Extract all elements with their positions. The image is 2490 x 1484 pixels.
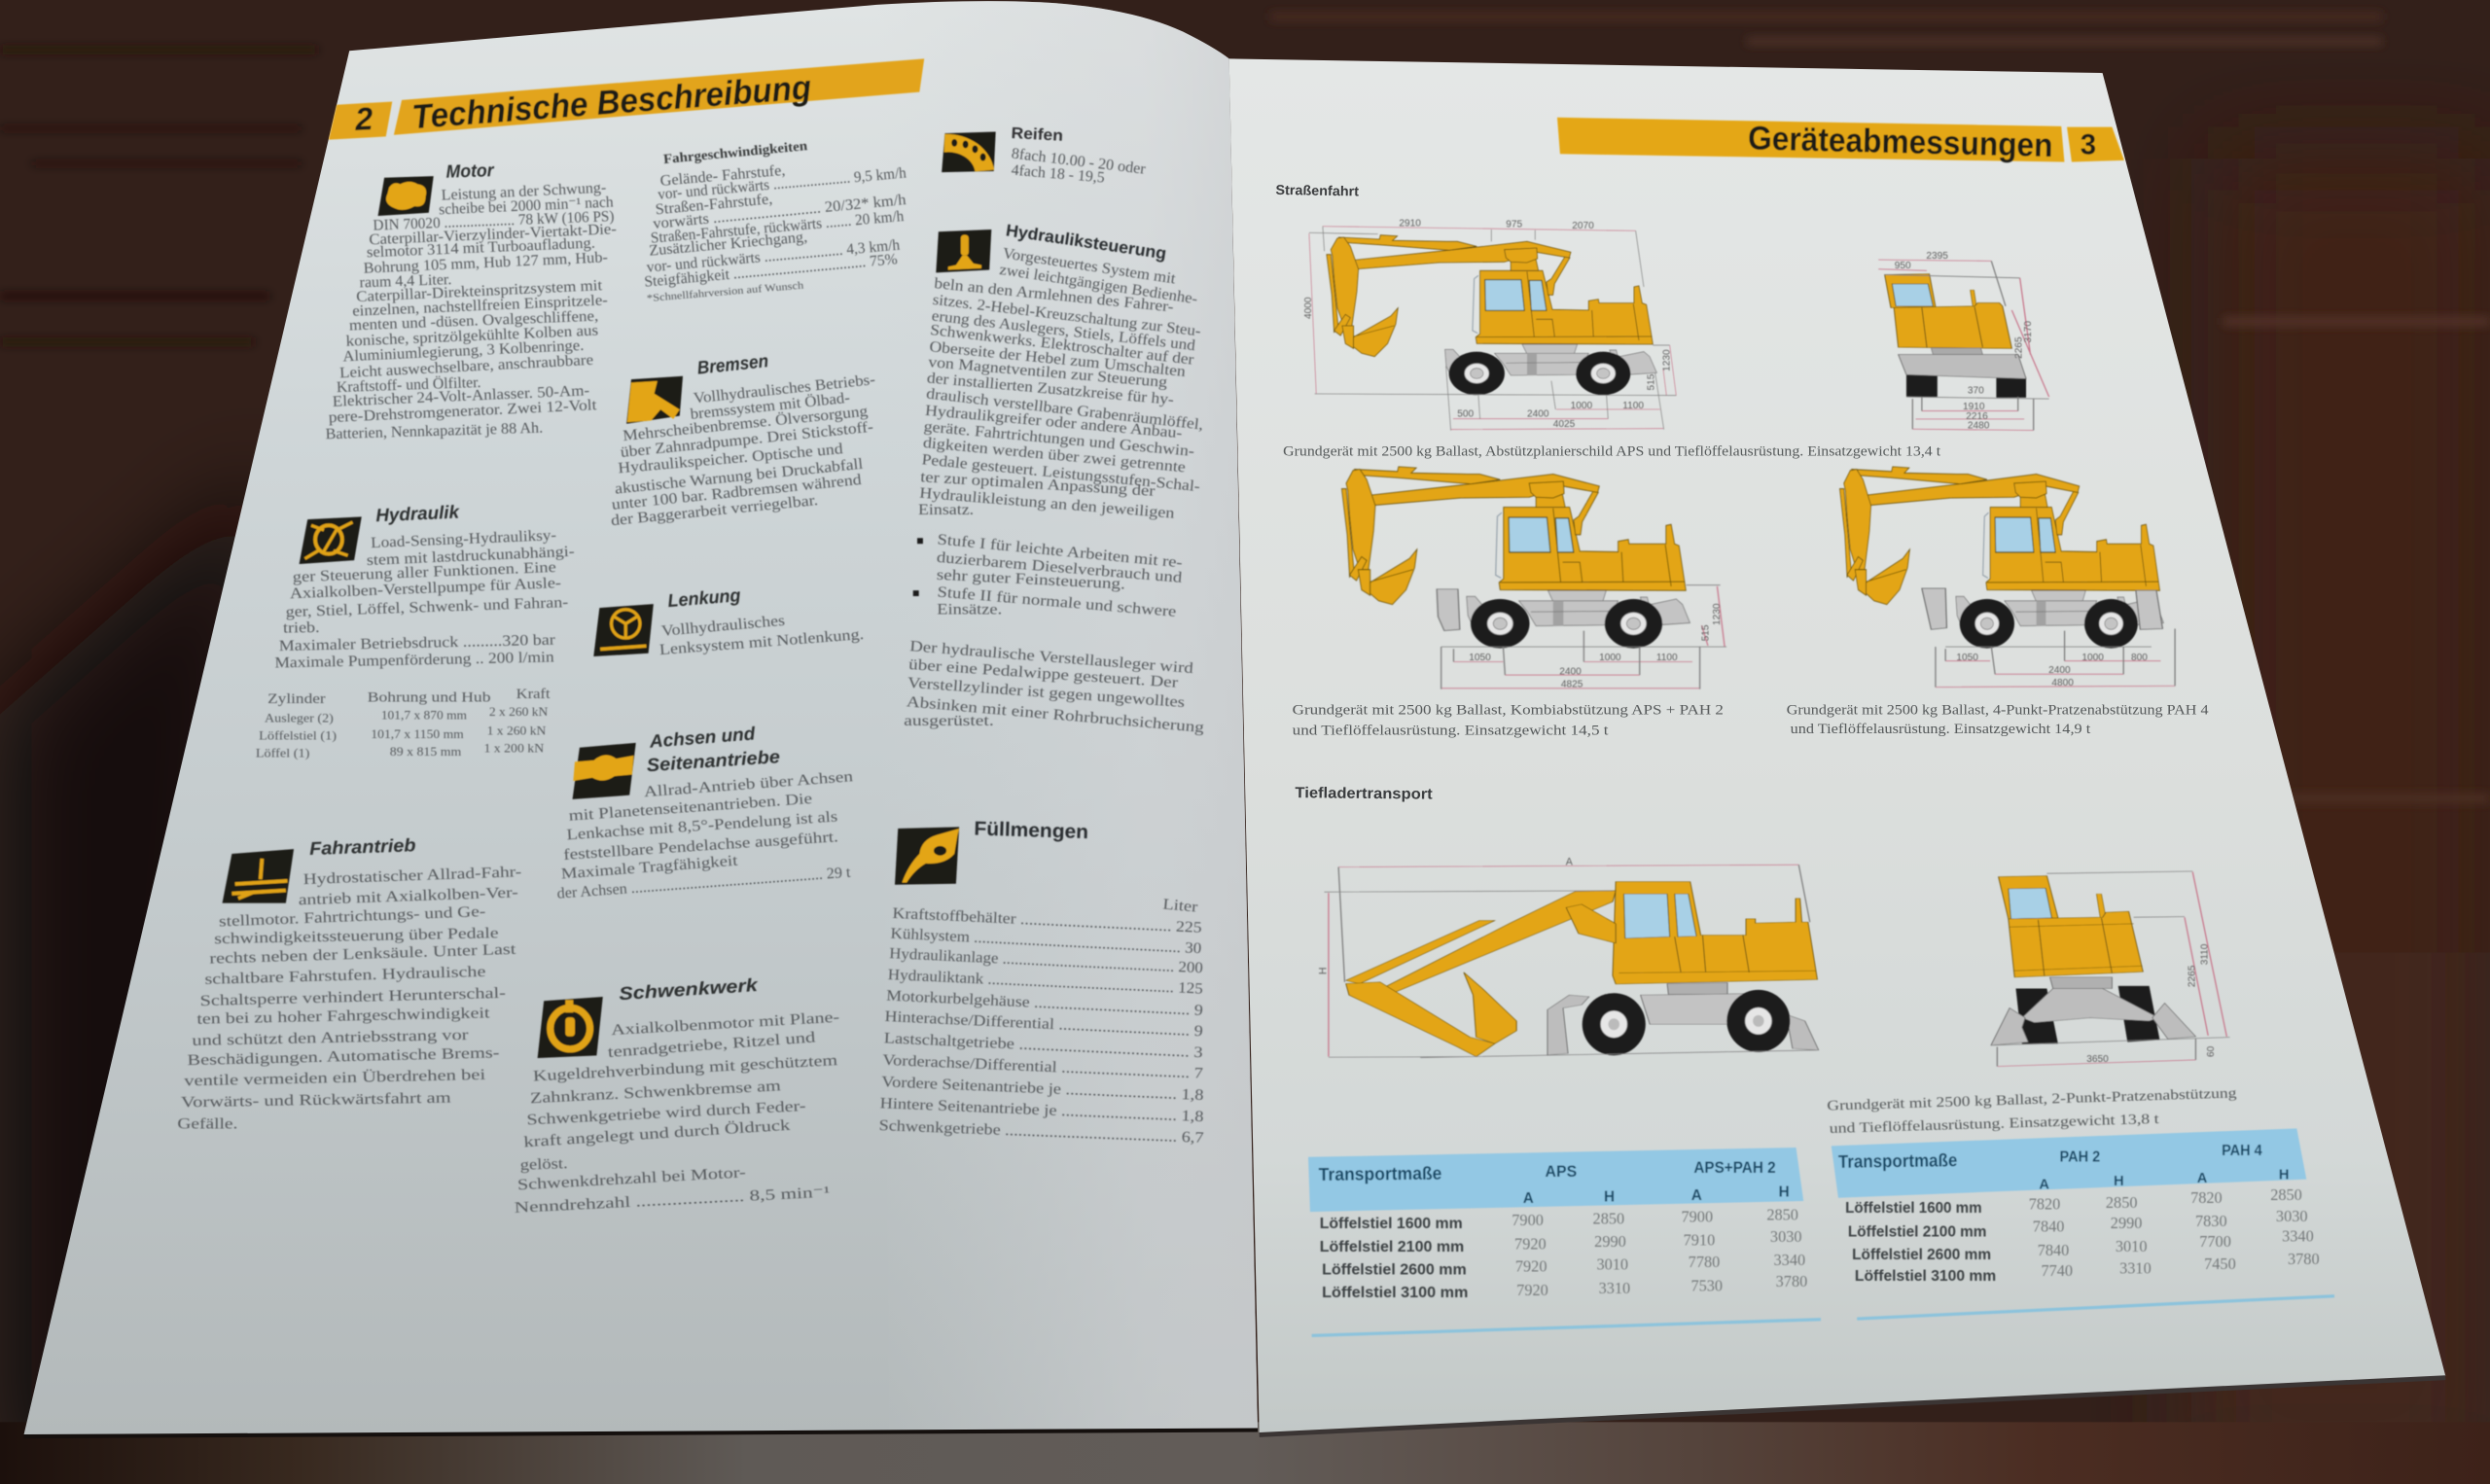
table: Transportmaße APS, APS+PAH 2: 7920 [1515, 1256, 1547, 1275]
table: Transportmaße PAH 2, PAH 4: 7840 [2033, 1218, 2064, 1235]
section: Füllmengen [878, 818, 1204, 1147]
right page [1229, 58, 2445, 1434]
text: Hydraulik description: trieb. [283, 619, 320, 637]
text: Verstellausleger: ausgerüstet. [904, 713, 994, 729]
table: Transportmaße APS, APS+PAH 2: 7530 [1690, 1277, 1723, 1295]
table: Transportmaße PAH 2, PAH 4 [1832, 1128, 2334, 1319]
list: capacities in litres: Motorkurbelgehäuse .................................... 9 [886, 988, 1203, 1019]
section: Reifen [942, 124, 1147, 187]
list: capacities in litres [878, 897, 1204, 1147]
left page [23, 1, 1258, 1436]
table: Transportmaße PAH 2, PAH 4: Löffelstiel 1600 mm [1845, 1200, 1982, 1217]
text: Fahrantrieb description: ten bei zu hoher Fahrgeschwindigkeit [196, 1005, 490, 1028]
list: capacities in litres: Kraftstoffbehälter ................................... 225 [892, 905, 1202, 936]
text: Hydrauliksteuerung description: zwei leichtgängigen Bedienhe- [998, 262, 1198, 307]
text: Schwenkwerk description: Zahnkranz. Schwenkbremse am [530, 1078, 782, 1107]
text: Hydrauliksteuerung description: Hydraulikgreifer oder andere Anbau- [924, 403, 1183, 442]
text: Fahrantrieb description: Gefälle. [177, 1115, 237, 1132]
text: Schwenkwerk description: Nenndrehzahl ..................... 8,5 min⁻¹ [514, 1184, 831, 1217]
caption: APS configuration: Grundgerät mit 2500 kg Ballast, Abstützplanierschild APS und Tieflöffelausrüstung. Einsatzgewicht 13,4 t [1283, 443, 1940, 459]
header: Geräteabmessungen [1557, 118, 2124, 164]
table: Transportmaße APS, APS+PAH 2: A [1523, 1190, 1534, 1207]
diagram: side view with APS: 975 [1506, 219, 1522, 230]
list: capacities in litres: Schwenkgetriebe ....................................... 6,7 [878, 1117, 1204, 1147]
text: Motor description: Caterpillar-Vierzylinder-Viertakt-Die- [369, 221, 617, 248]
speed list: Straßen-Fahrstufe, [655, 191, 773, 218]
diagram: low-loader transport rear view: 3110 [2199, 943, 2210, 965]
table: Transportmaße APS, APS+PAH 2: 3310 [1599, 1279, 1630, 1297]
diagram: side view PAH 4: 1000 [2081, 653, 2104, 663]
text: Hydrauliksteuerung description: erung des Auslegers, Stiels, Löffels und [931, 307, 1196, 354]
text: Bremsen description: Hydraulikspeicher. Optische und [618, 441, 843, 477]
chapter number bar [329, 100, 392, 140]
icon: slewing ring [538, 997, 603, 1058]
speed list: vor- und rückwärts ..................... 4,3 km/h [646, 237, 901, 276]
speed list [644, 162, 907, 304]
heading: Schwenkwerk: Schwenkwerk [619, 974, 760, 1004]
speed list: Zusätzlicher Kriechgang, [649, 229, 808, 260]
heading: Hydraulik: Hydraulik [375, 502, 461, 525]
table: Transportmaße APS, APS+PAH 2: H [1604, 1188, 1615, 1205]
diagram: side view PAH 4 [1839, 467, 2175, 689]
diagram: side view APS + PAH 2: 1100 [1656, 653, 1678, 663]
text: Verstellausleger: Absinken mit einer Rohrbruchsicherung [906, 693, 1205, 736]
caption: APS + PAH 2 configuration [1293, 702, 1724, 739]
diagram: side view APS + PAH 2: 1000 [1599, 653, 1621, 663]
table: Transportmaße PAH 2, PAH 4: 2850 [2270, 1185, 2302, 1204]
icon: engine [378, 176, 434, 216]
chapter number bar [2067, 127, 2124, 161]
table: Transportmaße PAH 2, PAH 4: 7820 [2029, 1195, 2060, 1214]
text: Hydrauliksteuerung description: geräte. Fahrtrichtungen und Geschwin- [923, 418, 1195, 460]
diagram: side view APS + PAH 2: 1050 [1469, 653, 1491, 663]
icon: tyre [942, 131, 996, 172]
diagram: rear view with APS: 2265 [2013, 336, 2024, 359]
diagram: rear view with APS: 1910 [1963, 402, 1985, 412]
icon: steering wheel [593, 604, 654, 656]
text: Hydrauliksteuerung description: Oberseite der Hebel zum Umschalten [929, 338, 1187, 380]
diagram: low-loader transport side view [1317, 856, 1819, 1058]
text: Motor description: scheibe bei 2000 min⁻¹ nach [439, 194, 614, 218]
text: Achsen description: mit Planetenseitenantrieben. Die [568, 791, 813, 825]
text: Motor description: Aluminiumlegierung, 3 Kolbenringe. [342, 337, 585, 365]
icon: axle [573, 743, 636, 799]
table: Transportmaße APS, APS+PAH 2: 7900 [1681, 1208, 1713, 1226]
text: Hydrauliksteuerung description: Hydraulikleistung an den jeweiligen [919, 485, 1175, 522]
text: Motor description: Bohrung 105 mm, Hub 127 mm, Hub- [363, 249, 608, 277]
text: Motor description: Batterien, Nennkapazität je 88 Ah. [325, 420, 543, 442]
text: Bremsen description: Vollhydraulisches Betriebs- [693, 371, 876, 407]
diagram: low-loader transport side view: A [1566, 856, 1574, 867]
text: Motor description: Caterpillar-Direkteinspritzsystem mit [356, 277, 603, 305]
table: cylinders: 1 x 260 kN [487, 724, 547, 738]
text: Fahrantrieb description: und schützt den Antriebsstrang vor [192, 1027, 470, 1049]
text: Fahrantrieb description: stellmotor. Fahrtrichtungs- und Ge- [219, 903, 486, 930]
table: Transportmaße APS, APS+PAH 2: Transportmaße [1319, 1163, 1441, 1184]
table: Transportmaße APS, APS+PAH 2: 3010 [1596, 1255, 1628, 1274]
text: Bremsen description: akustische Warnung bei Druckabfall [614, 456, 865, 498]
text: Fahrantrieb description: antrieb mit Axialkolben-Ver- [298, 884, 518, 908]
text: Verstellausleger [904, 638, 1205, 736]
speed list: *Schnellfahrversion auf Wunsch [647, 280, 804, 304]
text: Achsen description: Maximale Tragfähigkeit [560, 853, 739, 883]
table: cylinders: Zylinder [267, 691, 326, 707]
section: Achsen und Seitenantriebe [556, 723, 854, 902]
chapter number bar: 2 [353, 100, 374, 137]
speed list: Straßen-Fahrstufe, rückwärts ....... 20 km/h [650, 208, 905, 247]
table: Transportmaße APS, APS+PAH 2: Löffelstiel 2100 mm [1320, 1239, 1464, 1255]
caption: APS + PAH 2 configuration: und Tieflöffelausrüstung. Einsatzgewicht 14,5 t [1293, 724, 1609, 739]
table: Transportmaße APS, APS+PAH 2: 2990 [1594, 1232, 1626, 1251]
table: Transportmaße PAH 2, PAH 4: A [2197, 1171, 2208, 1186]
diagram: rear view with APS: 950 [1895, 261, 1911, 271]
text: Fahrantrieb description: Beschädigungen. Automatische Brems- [187, 1044, 500, 1069]
text: Bremsen description: unter 100 bar. Radbremsen während [611, 472, 863, 513]
table: Transportmaße PAH 2, PAH 4: 2850 [2106, 1193, 2138, 1212]
list: capacities in litres: Liter [1162, 897, 1199, 916]
caption: PAH 4 configuration [1787, 702, 2209, 737]
table: cylinders [256, 687, 551, 760]
text: Verstellausleger: Verstellzylinder ist gegen ungewolltes [907, 675, 1186, 711]
text: Motor description [325, 180, 617, 442]
text: Schwenkwerk description: gelöst. [519, 1155, 568, 1174]
caption: PAH 2 configuration: und Tieflöffelausrüstung. Einsatzgewicht 13,8 t [1829, 1112, 2159, 1137]
text: Schwenkwerk description [514, 1009, 840, 1217]
text: Motor description: konische, spritzölgekühlte Kolben aus [345, 322, 598, 350]
text: Reifen description: 4fach 18 - 19,5 [1011, 162, 1106, 187]
subheading: Straßenfahrt: Straßenfahrt [1275, 182, 1359, 198]
list: capacities in litres: Hydrauliktank ............................................. 125 [887, 967, 1203, 998]
table: cylinders: Kraft [516, 687, 551, 702]
text: Schwenkwerk description: Schwenkgetriebe wird durch Feder- [526, 1098, 806, 1128]
text: Achsen description: Allrad-Antrieb über Achsen [643, 768, 854, 800]
table: Transportmaße PAH 2, PAH 4: Löffelstiel 3100 mm [1855, 1268, 1996, 1285]
table: Transportmaße APS, APS+PAH 2: Löffelstiel 1600 mm [1320, 1216, 1463, 1232]
diagram: side view with APS: 2070 [1572, 221, 1594, 231]
text: Hydrauliksteuerung description: Vorgesteuertes System mit [1002, 245, 1177, 288]
list: capacities in litres: Hintere Seitenantriebe je .......................... 1,8 [879, 1095, 1204, 1125]
text: Hydrauliksteuerung description: von Magnetventilen zur Steuerung [928, 354, 1168, 391]
table: Transportmaße APS, APS+PAH 2: 3780 [1776, 1272, 1807, 1290]
text: Lenkung description [658, 613, 865, 658]
diagram: side view PAH 4: 2400 [2048, 665, 2071, 676]
header: Technische Beschreibung [329, 58, 924, 140]
table: cylinders: Ausleger (2) [265, 712, 334, 725]
text: Bremsen description: über Zahnradpumpe. Drei Stickstoff- [620, 419, 874, 461]
text: Schwenkwerk description: Axialkolbenmotor mit Plane- [611, 1009, 840, 1039]
diagram: low-loader transport rear view [1991, 871, 2230, 1067]
bullet list: Stufen: sehr guter Feinsteuerung. [936, 567, 1125, 593]
text: Motor description: selmotor 3114 mit Turboaufladung. [367, 235, 595, 261]
icon: fuel nozzle [895, 827, 959, 885]
table: Transportmaße PAH 2, PAH 4: Löffelstiel 2100 mm [1848, 1223, 1986, 1240]
text: Fahrantrieb description: schwindigkeitssteuerung über Pedale [214, 925, 499, 947]
diagram: side view with APS: 1000 [1571, 401, 1593, 411]
diagram: low-loader transport rear view: 60 [2206, 1045, 2217, 1057]
text: Hydrauliksteuerung description: digkeiten werden über zwei getrennte [922, 435, 1187, 476]
section: Bremsen [610, 350, 876, 529]
diagram: side view with APS [1303, 219, 1676, 431]
list: capacities in litres: Kühlsystem .................................................. 30 [890, 926, 1202, 957]
icon: control lever [936, 230, 991, 272]
table: Transportmaße PAH 2, PAH 4: 7830 [2195, 1212, 2227, 1230]
diagram: rear view with APS: 2216 [1966, 411, 1988, 422]
text: Hydrauliksteuerung description: draulisch verstellbare Grabenräumlöffel, [925, 385, 1204, 434]
text: Hydrauliksteuerung description: sitzes. 2-Hebel-Kreuzschaltung zur Steu- [932, 292, 1202, 340]
table: Transportmaße APS, APS+PAH 2: A [1691, 1187, 1702, 1204]
text: Lenkung description: Lenksystem mit Notlenkung. [658, 626, 865, 658]
text: Schwenkwerk description: tenradgetriebe, Ritzel und [607, 1029, 816, 1061]
table: Transportmaße APS, APS+PAH 2: 3340 [1774, 1251, 1805, 1269]
heading: Achsen und Seitenantriebe: Achsen und [648, 723, 757, 752]
diagram: side view APS + PAH 2: 2400 [1559, 667, 1582, 678]
text: Hydraulik description: stem mit lastdruckunabhängi- [367, 544, 575, 569]
diagram: side view with APS: 2910 [1399, 219, 1421, 230]
text: Fahrantrieb description: ventile vermeiden ein Überdrehen bei [184, 1066, 486, 1089]
table: Transportmaße PAH 2, PAH 4: 3010 [2116, 1237, 2147, 1255]
text: Hydrauliksteuerung description: beln an den Armlehnen des Fahrer- [934, 275, 1174, 316]
table: Transportmaße APS, APS+PAH 2: Löffelstiel 3100 mm [1322, 1285, 1468, 1301]
heading: Füllmengen: Füllmengen [974, 818, 1088, 843]
text: Schwenkwerk description: Kugeldrehverbindung mit geschütztem [533, 1052, 838, 1084]
table: Transportmaße PAH 2, PAH 4: 3030 [2276, 1207, 2308, 1225]
text: Hydrauliksteuerung description: ter zur optimalen Anpassung der [920, 469, 1156, 500]
diagram: rear view with APS: 3170 [2023, 321, 2034, 343]
heading: Bremsen: Bremsen [696, 350, 769, 378]
text: Bremsen description [610, 371, 876, 529]
bullet list: Stufen: Stufe I für leichte Arbeiten mit re- [937, 531, 1183, 572]
diagram: rear view with APS [1878, 251, 2049, 432]
title bar: Geräteabmessungen [1748, 120, 2053, 164]
section: Lenkung [593, 584, 865, 658]
heading: Achsen und Seitenantriebe [646, 723, 780, 775]
diagram: rear view with APS: 2480 [1968, 421, 1990, 432]
text: Motor description: Elektrischer 24-Volt-Anlasser. 50-Am- [332, 382, 589, 410]
table: Transportmaße PAH 2, PAH 4: H [2279, 1168, 2289, 1184]
table: Transportmaße PAH 2, PAH 4: 7700 [2199, 1232, 2231, 1251]
table: cylinders: 101,7 x 1150 mm [371, 727, 464, 741]
text: Motor description: Leistung an der Schwung- [441, 180, 607, 204]
table: Transportmaße PAH 2, PAH 4: 7450 [2204, 1254, 2236, 1273]
diagram: side view with APS: 500 [1457, 408, 1475, 419]
table: Transportmaße APS, APS+PAH 2: H [1779, 1184, 1790, 1201]
text: Fahrantrieb description: Schaltsperre verhindert Herunterschal- [199, 985, 506, 1009]
table: Transportmaße APS, APS+PAH 2: APS [1546, 1163, 1577, 1181]
bullet list: Stufen: Einsätze. [937, 602, 1002, 618]
text: Hydrauliksteuerung description: Pedale gesteuert. Leistungsstufen-Schal- [921, 451, 1201, 495]
text: Motor description: raum 4,4 Liter. [359, 271, 452, 291]
diagram: low-loader transport rear view: 2265 [2187, 965, 2197, 987]
heading: Fahrgeschwindigkeiten: Fahrgeschwindigkeiten [662, 138, 808, 167]
diagram: side view with APS: 1100 [1622, 401, 1644, 411]
text: Motor description: Kraftstoff- und Ölfilter. [337, 373, 481, 396]
diagram: rear view with APS: 2395 [1926, 251, 1948, 262]
text: Hydrauliksteuerung description [918, 245, 1204, 522]
table: Transportmaße PAH 2, PAH 4: A [2039, 1177, 2049, 1192]
heading: Achsen und Seitenantriebe: Seitenantriebe [646, 746, 780, 775]
table: cylinders: 89 x 815 mm [390, 745, 462, 759]
subheading: Tiefladertransport: Tiefladertransport [1295, 785, 1434, 803]
diagram: side view PAH 4: 1050 [1956, 653, 1978, 663]
text: Hydraulik description: Maximaler Betriebsdruck .........320 bar [279, 632, 556, 654]
section: Hydrauliksteuerung [904, 220, 1205, 736]
section: Motor [325, 159, 617, 442]
text: Schwenkwerk description: kraft angelegt und durch Öldruck [523, 1116, 791, 1150]
caption: PAH 4 configuration: und Tieflöffelausrüstung. Einsatzgewicht 14,9 t [1791, 722, 2090, 737]
table: Transportmaße APS, APS+PAH 2: 2850 [1766, 1205, 1798, 1223]
text: Motor description: DIN 70020 ................... 78 kW (106 PS) [373, 208, 615, 234]
text: Verstellausleger: über eine Pedalwippe gesteuert. Der [908, 656, 1180, 691]
table: cylinders: Bohrung und Hub [368, 689, 490, 705]
table: Transportmaße APS, APS+PAH 2: 7920 [1514, 1234, 1547, 1253]
speed list: vor- und rückwärts ..................... 9,5 km/h [658, 165, 907, 203]
text: Hydraulik description [274, 527, 575, 671]
table: Transportmaße APS, APS+PAH 2: 7900 [1512, 1211, 1544, 1229]
caption: PAH 2 configuration: Grundgerät mit 2500 kg Ballast, 2-Punkt-Pratzenabstützung [1827, 1085, 2237, 1114]
diagram: side view APS + PAH 2 [1341, 467, 1726, 690]
title bar [1557, 118, 2064, 164]
section: Schwenkwerk [514, 974, 840, 1217]
speed list: vorwärts ........................... 20/32* km/h [653, 192, 907, 232]
table: cylinders: Löffelstiel (1) [259, 729, 337, 743]
text: Fahrantrieb description: Hydrostatischer Allrad-Fahr- [302, 864, 521, 888]
diagram: side view APS + PAH 2: 4825 [1561, 680, 1583, 690]
diagram: side view with APS: 4025 [1553, 419, 1576, 430]
table: Transportmaße APS, APS+PAH 2: 7920 [1516, 1281, 1548, 1299]
heading: Lenkung: Lenkung [667, 584, 742, 611]
table: Transportmaße PAH 2, PAH 4: 7740 [2041, 1261, 2073, 1280]
table: cylinders: 1 x 200 kN [483, 742, 545, 756]
list: capacities in litres: Hydraulikanlage .......................................... 200 [889, 945, 1203, 976]
text: Motor description: einzelnen, nachstellfreien Einspritzele- [352, 292, 608, 320]
bullet list: Stufen: Stufe II für normale und schwere [937, 583, 1177, 620]
list: capacities in litres: Lastschaltgetriebe ...................................... 3 [883, 1030, 1203, 1061]
table: Transportmaße PAH 2, PAH 4: 3340 [2282, 1226, 2314, 1245]
text: Hydraulik description: Axialkolben-Verstellpumpe für Ausle- [290, 575, 561, 602]
list: capacities in litres: Hinterachse/Differential .............................. 9 [884, 1008, 1203, 1040]
diagram: side view APS + PAH 2: 1230 [1712, 603, 1723, 625]
section: Fahrgeschwindigkeiten [644, 138, 907, 304]
text: Achsen description: der Achsen ................................................. 29 t [556, 865, 852, 902]
bullet list: Stufen [913, 531, 1183, 620]
speed list: Steigfähigkeit ................................... 75% [644, 251, 898, 291]
table: Transportmaße PAH 2, PAH 4: PAH 2 [2060, 1149, 2100, 1166]
table: cylinders: 2 x 260 kN [489, 705, 549, 719]
text: Fahrantrieb description: rechts neben der Lenksäule. Unter Last [209, 941, 516, 968]
caption: PAH 4 configuration: Grundgerät mit 2500 kg Ballast, 4-Punkt-Pratzenabstützung PAH 4 [1787, 702, 2209, 718]
text: Motor description: Leicht auswechselbare, anschraubbare [339, 352, 593, 381]
table: Transportmaße APS, APS+PAH 2: 3030 [1770, 1227, 1802, 1246]
text: Bremsen description: der Baggerarbeit verriegelbar. [610, 492, 819, 529]
table: Transportmaße PAH 2, PAH 4: PAH 4 [2222, 1143, 2262, 1159]
text: Motor description: menten und -düsen. Ovalgeschliffene, [349, 308, 598, 334]
text: Lenkung description: Vollhydraulisches [660, 613, 786, 640]
table: Transportmaße PAH 2, PAH 4: 7840 [2038, 1241, 2069, 1259]
section: Hydraulik [256, 502, 575, 760]
text: Hydraulik description: Maximale Pumpenförderung .. 200 l/min [274, 649, 554, 671]
text: Achsen description: Lenkachse mit 8,5°-Pendelung ist als [566, 808, 838, 843]
title bar: Technische Beschreibung [410, 68, 812, 136]
table: Transportmaße APS, APS+PAH 2: 7780 [1689, 1253, 1720, 1271]
text: Motor description: pere-Drehstromgenerator. Zwei 12-Volt [328, 397, 597, 426]
table: cylinders: Löffel (1) [256, 747, 309, 760]
icon: hydraulics [300, 516, 362, 564]
diagram: low-loader transport rear view: 3650 [2086, 1054, 2109, 1065]
heading: Motor: Motor [445, 159, 495, 182]
text: Achsen description: feststellbare Pendelachse ausgeführt. [563, 829, 838, 864]
section: Fahrantrieb [177, 834, 521, 1132]
text: Verstellausleger: Der hydraulische Verstellausleger wird [909, 638, 1193, 677]
icon: drive [223, 849, 294, 903]
text: Fahrantrieb description [177, 864, 521, 1132]
speed list: Gelände- Fahrstufe, [659, 162, 786, 190]
table: Transportmaße PAH 2, PAH 4: Löffelstiel 2600 mm [1852, 1247, 1991, 1263]
diagram: low-loader transport side view: H [1317, 967, 1329, 974]
table: Transportmaße PAH 2, PAH 4: 3780 [2288, 1250, 2320, 1268]
text: Bremsen description: Mehrscheibenbremse. Ölversorgung [622, 403, 869, 444]
heading: Hydrauliksteuerung: Hydrauliksteuerung [1005, 220, 1168, 263]
heading: Reifen: Reifen [1011, 124, 1063, 145]
table: Transportmaße APS, APS+PAH 2: 2850 [1593, 1209, 1624, 1227]
table: Transportmaße PAH 2, PAH 4: 7820 [2190, 1188, 2223, 1207]
table: Transportmaße APS, APS+PAH 2: APS+PAH 2 [1693, 1159, 1776, 1177]
chapter number bar: 3 [2081, 128, 2096, 160]
diagram: side view with APS: 2400 [1527, 408, 1549, 419]
list: capacities in litres: Vorderachse/Differential ............................. 7 [882, 1052, 1203, 1082]
diagram: side view with APS: 1230 [1662, 349, 1673, 371]
text: Bremsen description: bremssystem mit Ölbad- [690, 389, 851, 423]
table: Transportmaße PAH 2, PAH 4: 3310 [2119, 1259, 2152, 1278]
diagram: side view PAH 4: 800 [2131, 653, 2148, 663]
bullet list: Stufen: duzierbarem Dieselverbrauch und [936, 549, 1183, 586]
heading: Fahrantrieb: Fahrantrieb [309, 834, 416, 859]
text: Schwenkwerk description: Schwenkdrehzahl bei Motor- [517, 1164, 746, 1193]
diagram: side view with APS: 515 [1647, 373, 1657, 390]
text: Hydrauliksteuerung description: Einsatz. [918, 502, 974, 518]
table: Transportmaße PAH 2, PAH 4: Transportmaße [1838, 1149, 1957, 1172]
caption: PAH 2 configuration [1827, 1085, 2237, 1137]
text: Reifen description: 8fach 10.00 - 20 oder [1011, 145, 1147, 178]
text: Fahrantrieb description: Vorwärts- und Rückwärtsfahrt am [181, 1090, 452, 1111]
table: Transportmaße PAH 2, PAH 4: H [2114, 1174, 2124, 1189]
icon: brakes [626, 376, 683, 424]
table: Transportmaße APS, APS+PAH 2: 7910 [1684, 1230, 1715, 1249]
text: Fahrantrieb description: schaltbare Fahrstufen. Hydraulische [204, 964, 486, 988]
diagram: side view with APS: 4000 [1303, 297, 1314, 319]
diagram: side view PAH 4: 4800 [2051, 678, 2074, 689]
diagram: rear view with APS: 370 [1968, 386, 1984, 397]
table: cylinders: 101,7 x 870 mm [381, 708, 468, 722]
text: Achsen description [556, 768, 854, 902]
diagram: side view APS + PAH 2: 515 [1701, 624, 1712, 641]
text: Hydraulik description: ger, Stiel, Löffel, Schwenk- und Fahran- [285, 594, 568, 620]
text: Hydraulik description: Load-Sensing-Hydrauliksy- [371, 527, 556, 551]
table: Transportmaße PAH 2, PAH 4: 2990 [2111, 1214, 2142, 1232]
list: capacities in litres: Vordere Seitenantriebe je ......................... 1,8 [881, 1074, 1204, 1104]
caption: APS + PAH 2 configuration: Grundgerät mit 2500 kg Ballast, Kombiabstützung APS + PAH 2 [1293, 702, 1724, 718]
table: Transportmaße APS, APS+PAH 2: Löffelstiel 2600 mm [1322, 1262, 1467, 1279]
text: Hydrauliksteuerung description: Schwenkwerks. Elektroschalter auf der [929, 322, 1195, 369]
table: Transportmaße APS, APS+PAH 2 [1308, 1148, 1821, 1335]
text: Hydrauliksteuerung description: der installierten Zusatzkreise für hy- [926, 370, 1174, 408]
text: Hydraulik description: ger Steuerung aller Funktionen. Eine [293, 559, 556, 585]
